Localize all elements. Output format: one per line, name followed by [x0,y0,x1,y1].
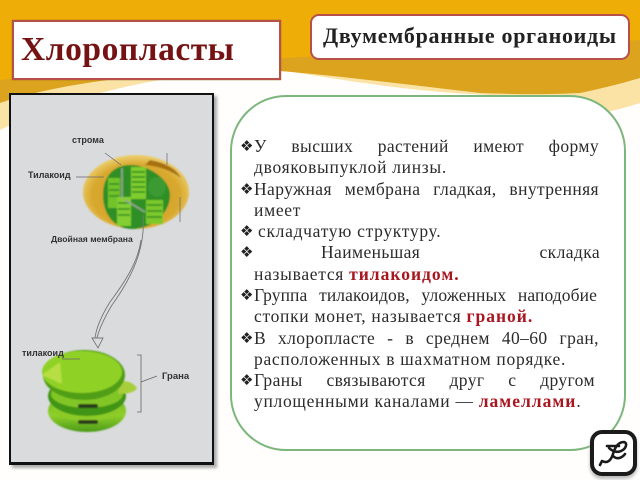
labels: Тилакоид [28,170,71,180]
text block: facts list: складчатую структуру. [258,221,441,241]
text block: facts list: друг [449,370,484,390]
heading pill: Двумембранные органоиды: Двумембранные органоиды [323,23,617,48]
text block: facts list: складка [540,242,600,262]
icon: logo badge [590,430,637,476]
text block: facts list: ❖ [240,222,253,240]
text block: facts list: - [387,328,393,348]
text block: facts list: уложенных [421,285,506,305]
panel: description card [230,95,626,451]
title: Хлоропласты [12,20,281,80]
labels: тилакоид [22,348,64,358]
text block: facts list: Граны [254,370,303,390]
text block: facts list: ❖ [240,286,253,304]
text block: facts list: связываются [326,370,426,390]
text block: facts list: имеет [254,200,301,220]
labels: Грана [162,371,190,382]
text block: facts list: ❖ [240,137,253,155]
text block: facts list: форму [549,136,599,156]
text block: facts list: с [508,370,516,390]
labels: строма [72,135,105,145]
panel: chloroplast diagram [9,93,214,465]
icon: chloroplast cross-section [83,155,189,229]
text block: facts list: наподобие [518,285,597,305]
text block: facts list: В [254,328,266,348]
text block: facts list: высших [291,136,353,156]
text block: facts list: называется тилакоидом. [254,264,460,284]
text block: facts list: ❖ [240,243,253,261]
icon: grana stack [42,350,137,432]
heading pill: Двумембранные органоиды [310,14,630,60]
text block: facts list: гладкая, [433,179,497,199]
text block: facts list: хлоропласте [278,328,375,348]
text block: facts list: среднем [426,328,490,348]
text block: facts list: ❖ [240,329,253,347]
text block: facts list: растений [378,136,449,156]
text block: facts list: мембрана [345,179,420,199]
text block: facts list: в [405,328,414,348]
text block: facts list: имеют [473,136,524,156]
bracket [62,355,157,412]
text block: facts list: гран, [560,328,599,348]
text block: facts list: стопки монет, называется граной. [254,306,533,326]
labels: Двойная мембрана [51,234,133,244]
text block: facts list: ❖ [240,180,253,198]
text block: facts list: ❖ [240,371,253,389]
title: Хлоропласты: Хлоропласты [21,31,234,68]
text block: facts list: уплощенными каналами — ламеллами. [254,391,581,411]
text block: facts list: двояковыпуклой линзы. [254,157,447,177]
text block: facts list: Наименьшая [321,242,420,262]
text block: facts list: Наружная [254,179,332,199]
label lines [76,153,180,222]
text block: facts list: 40–60 [502,328,548,348]
text block: facts list: внутренняя [509,179,599,199]
text block: facts list: другом [540,370,595,390]
labels [22,135,190,382]
text block: facts list: Группа [254,285,307,305]
text block: facts list: У [254,136,267,156]
text block: facts list: расположенных в шахматном порядке. [254,349,566,369]
arrow [92,215,143,348]
text block: facts list: тилакоидов, [319,285,410,305]
